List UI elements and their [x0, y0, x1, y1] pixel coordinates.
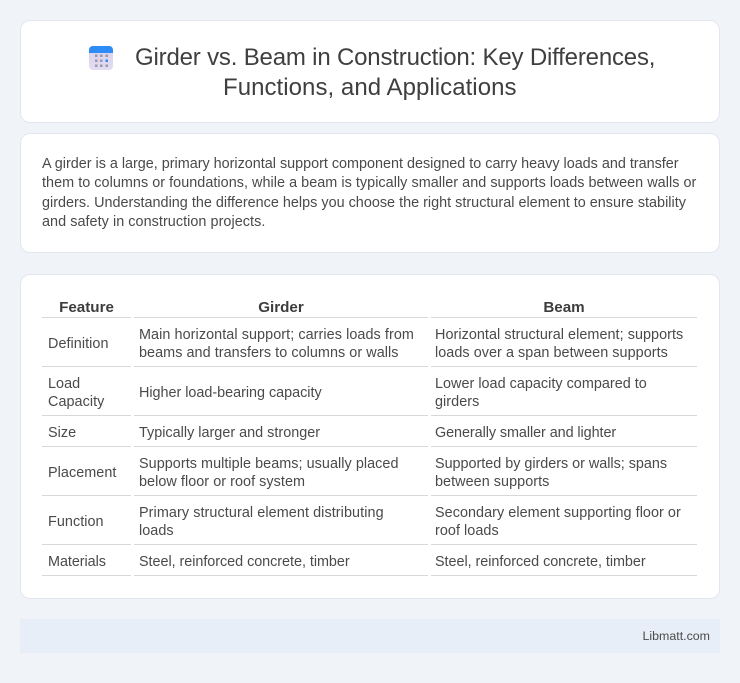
text: introduction: girders. Understanding the difference helps you choose the right structural element to ensure stability	[42, 195, 686, 211]
row: Load Capacity: Lower load capacity compared to	[435, 376, 647, 392]
row: Load Capacity	[48, 376, 647, 410]
row: Function: Function	[48, 514, 104, 530]
row: Placement: Supported by girders or walls; spans	[435, 456, 667, 472]
title: Girder vs. Beam in Construction: Key Differences,	[135, 44, 655, 71]
row: Materials: Materials	[48, 554, 106, 570]
row: Placement: Placement	[48, 465, 116, 481]
row: Function: roof loads	[435, 523, 499, 539]
table header: Girder: Girder	[258, 299, 304, 316]
table header: Beam: Beam	[543, 299, 585, 316]
row: Function: Secondary element supporting floor or	[435, 505, 681, 521]
text: introduction	[42, 156, 696, 230]
row: Placement: between supports	[435, 474, 549, 490]
row: Materials: Steel, reinforced concrete, timber	[435, 554, 646, 570]
row: Function: loads	[139, 523, 174, 539]
row: Function	[48, 505, 681, 539]
row: Load Capacity: Capacity	[48, 394, 104, 410]
row: Definition: loads over a span between supports	[435, 345, 668, 361]
panel: comparison table	[20, 274, 720, 599]
table header: Feature: Feature	[59, 299, 114, 316]
row: Definition	[48, 327, 683, 361]
row: Load Capacity: Higher load-bearing capacity	[139, 385, 322, 401]
panel: header	[20, 20, 720, 123]
row: Definition: Horizontal structural element; supports	[435, 327, 683, 343]
row: Materials	[48, 554, 646, 570]
title: Functions, and Applications	[223, 74, 517, 101]
row: Size: Size	[48, 425, 76, 441]
row: Definition: beams and transfers to columns or walls	[139, 345, 398, 361]
icon: calendar	[89, 46, 113, 70]
row: Placement: Supports multiple beams; usually placed	[139, 456, 399, 472]
row: Load Capacity: Load	[48, 376, 80, 392]
text: introduction: them to columns or foundations, while a beam is typically smaller and supports loads between walls or	[42, 175, 696, 191]
row: Placement	[48, 456, 667, 490]
footer	[20, 619, 720, 653]
text: introduction: A girder is a large, primary horizontal support component designed to carry heavy loads and transfer	[42, 156, 679, 172]
row: Placement: below floor or roof system	[139, 474, 305, 490]
row: Definition: Main horizontal support; carries loads from	[139, 327, 414, 343]
footer: Libmatt.com	[643, 629, 710, 643]
text: introduction: and safety in construction projects.	[42, 214, 265, 230]
row: Materials: Steel, reinforced concrete, timber	[139, 554, 350, 570]
row: Size: Typically larger and stronger	[139, 425, 320, 441]
panel: introduction	[20, 133, 720, 253]
row: Function: Primary structural element distributing	[139, 505, 384, 521]
row: Size	[48, 425, 616, 441]
row: Load Capacity: girders	[435, 394, 479, 410]
row: Size: Generally smaller and lighter	[435, 425, 616, 441]
title	[135, 44, 655, 101]
row: Definition: Definition	[48, 336, 108, 352]
